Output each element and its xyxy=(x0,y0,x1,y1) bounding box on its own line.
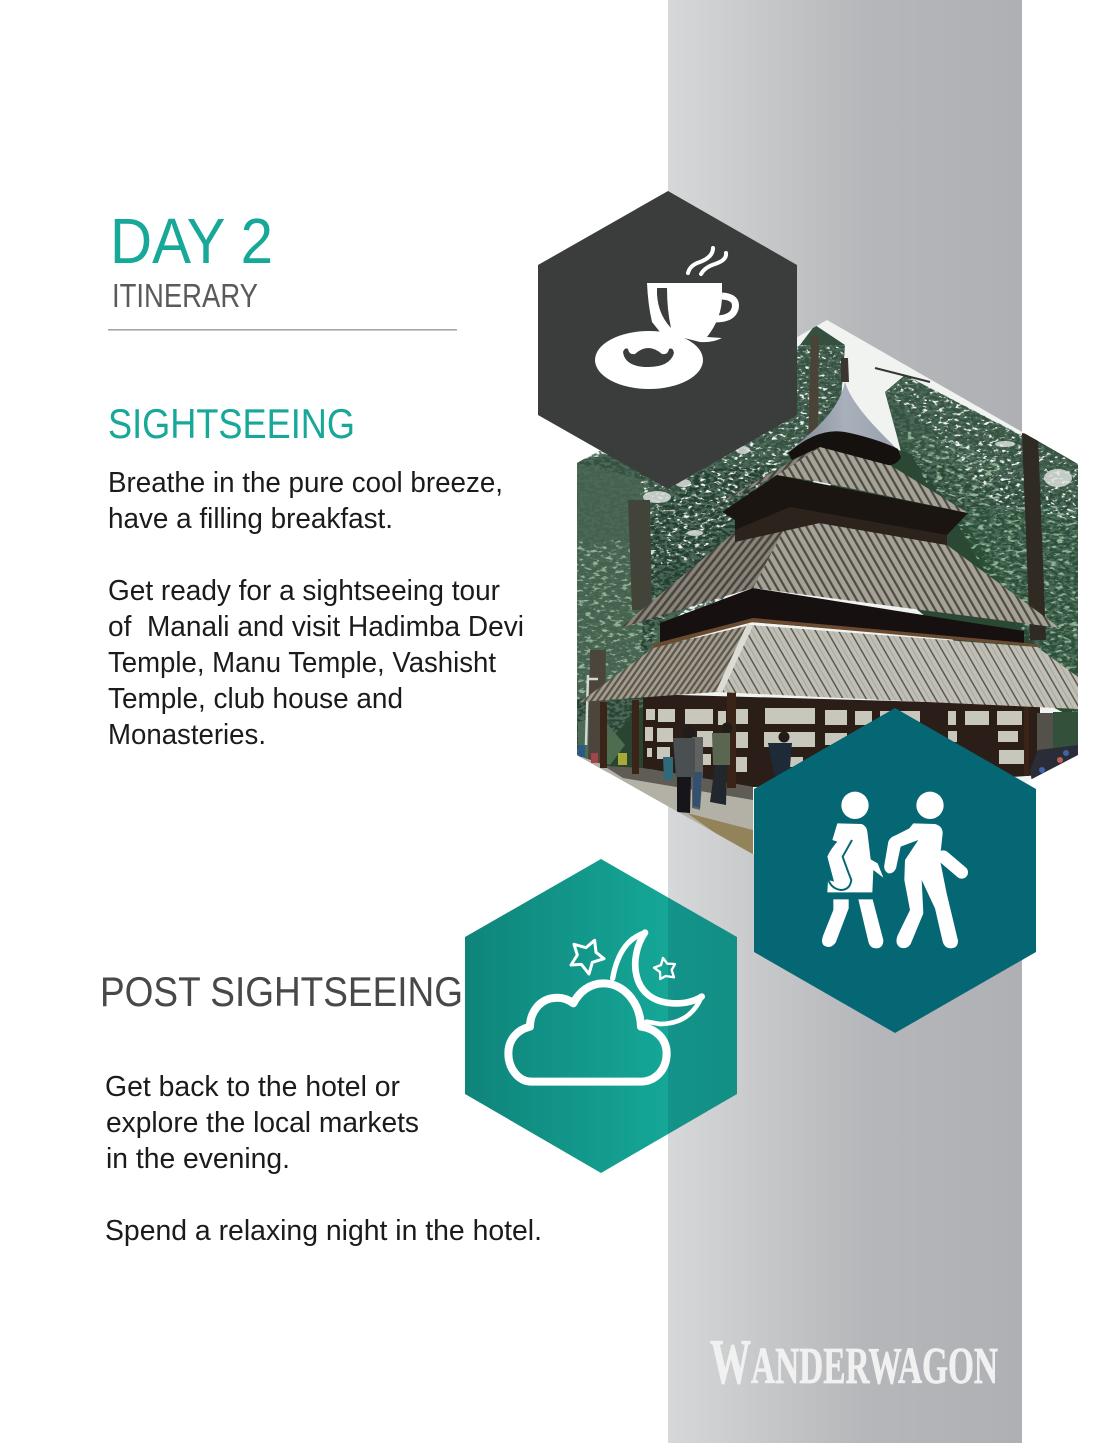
lowest roof xyxy=(717,625,1078,709)
grey vertical band xyxy=(668,0,1022,1443)
title: day 2: DAY 2 xyxy=(110,205,273,277)
icon: two walking people xyxy=(822,792,962,948)
visitors xyxy=(578,722,1078,813)
icon: coffee cup and donut xyxy=(595,248,735,389)
ground xyxy=(577,755,753,860)
text block: sightseeing description: Get ready for a sightseeing tour xyxy=(108,575,500,607)
finial xyxy=(841,358,849,382)
third roof xyxy=(753,518,1060,628)
second roof xyxy=(777,447,968,513)
temple building xyxy=(577,358,1078,860)
heading: sightseeing: SIGHTSEEING xyxy=(108,400,355,447)
icon: cloud moon and stars xyxy=(508,933,702,1082)
hexagon: walking xyxy=(754,708,1036,1033)
tree foliage xyxy=(577,325,1078,775)
text block: post sightseeing description: Spend a relaxing night in the hotel. xyxy=(105,1215,542,1247)
text block: sightseeing description: Temple, Manu Temple, Vashisht xyxy=(108,647,496,679)
carved end wall xyxy=(1037,713,1053,751)
text block: sightseeing description xyxy=(108,467,524,751)
photo: hadimba devi temple in hexagon xyxy=(577,320,1078,855)
sky gaps xyxy=(629,441,1072,536)
text block: post sightseeing description: in the evening. xyxy=(106,1143,290,1175)
text block: sightseeing description: have a filling breakfast. xyxy=(108,503,393,535)
text block: sightseeing description: Monasteries. xyxy=(108,719,266,751)
walls xyxy=(643,694,1040,787)
text block: sightseeing description: of Manali and visit Hadimba Devi xyxy=(108,611,524,643)
dark band under second roof xyxy=(722,475,968,545)
hexagon: breakfast xyxy=(538,191,797,489)
text block: post sightseeing description: explore the local markets xyxy=(106,1107,419,1139)
cone roof xyxy=(788,382,898,452)
text block: post sightseeing description: Get back to the hotel or xyxy=(105,1071,400,1103)
text block: post sightseeing description xyxy=(105,1071,542,1247)
hexagon: evening xyxy=(465,859,737,1173)
heading: post sightseeing: POST SIGHTSEEING xyxy=(100,968,463,1015)
pillars xyxy=(600,692,1029,788)
dark band under third roof xyxy=(660,588,1024,644)
tree trunks xyxy=(808,335,819,440)
text block: sightseeing description: Breathe in the pure cool breeze, xyxy=(108,467,503,499)
text block: sightseeing description: Temple, club house and xyxy=(108,683,403,715)
subtitle: itinerary: ITINERARY xyxy=(112,277,258,314)
